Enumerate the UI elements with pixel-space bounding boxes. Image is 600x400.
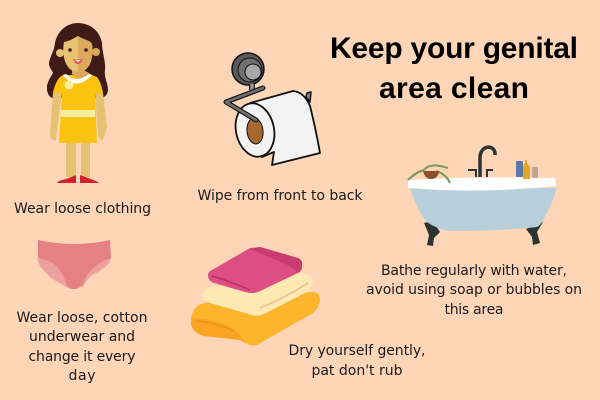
caption: dry yourself gently: pat don't rub <box>311 363 403 379</box>
caption: bathe regularly: avoid using soap or bubbles on <box>366 282 582 298</box>
caption: wear loose cotton underwear: change it every <box>28 349 136 365</box>
caption: wear loose cotton underwear <box>16 310 148 384</box>
icon: woman in yellow dress <box>47 23 108 183</box>
icon: bathtub <box>408 147 557 246</box>
caption: dry yourself gently <box>288 343 426 379</box>
title <box>330 32 578 105</box>
caption: wipe from front to back: Wipe from front to back <box>198 188 363 204</box>
title: area clean <box>379 72 529 105</box>
caption: bathe regularly: Bathe regularly with water, <box>381 263 567 279</box>
caption: bathe regularly: this area <box>444 302 504 318</box>
icon: stack of towels <box>191 247 320 346</box>
caption: wear loose clothing: Wear loose clothing <box>14 201 151 217</box>
caption: dry yourself gently: Dry yourself gently, <box>288 343 426 359</box>
title: Keep your genital <box>330 32 578 65</box>
caption: wear loose cotton underwear: day <box>68 368 96 384</box>
caption: wear loose cotton underwear: underwear and <box>29 329 135 345</box>
icon: toilet paper roll <box>226 53 320 165</box>
caption: wear loose cotton underwear: Wear loose, cotton <box>16 310 148 326</box>
caption: bathe regularly <box>366 263 582 318</box>
icon: underwear <box>37 240 111 289</box>
